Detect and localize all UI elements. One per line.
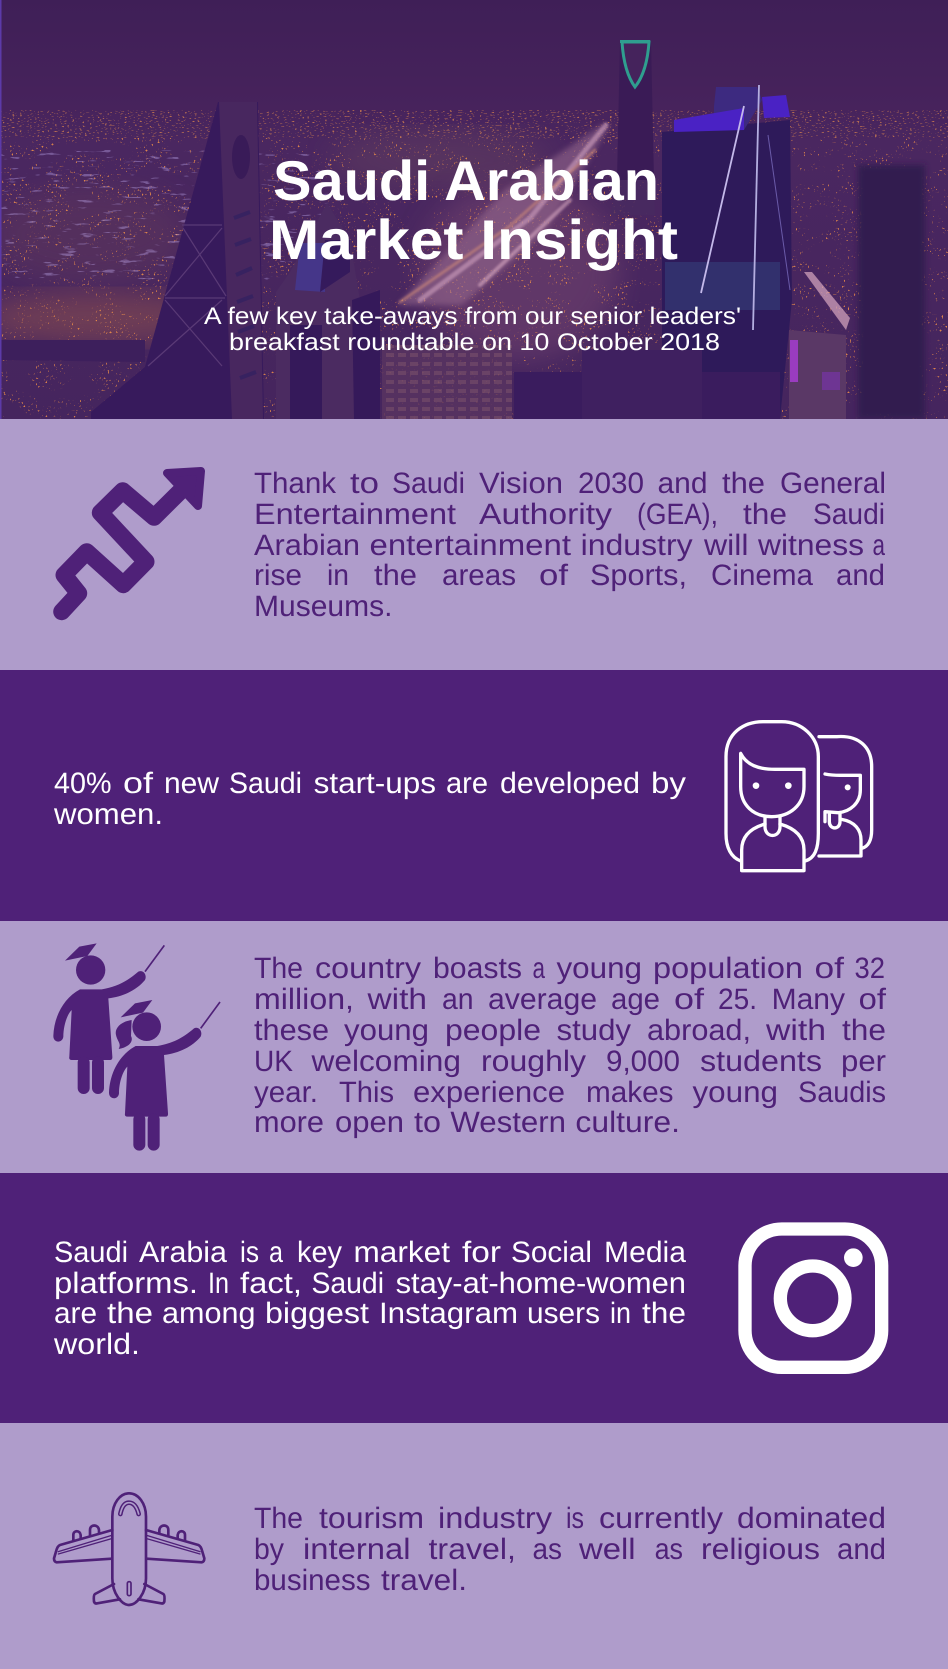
text: social media market: users: [527, 1297, 600, 1330]
text: 40% of start-ups: developed: [500, 767, 640, 800]
text: young population: these: [254, 1014, 329, 1047]
text: young population: UK: [254, 1045, 293, 1078]
text: young population: study: [556, 1014, 631, 1047]
text: tourism industry: business: [254, 1564, 370, 1597]
subtitle: A few key take-aways from our senior leaders': [204, 303, 741, 330]
text: young population: of: [674, 983, 705, 1016]
text: social media market: Social: [511, 1236, 592, 1269]
title: Market Insight: [269, 208, 678, 271]
text: young population: abroad,: [647, 1014, 751, 1047]
text: 40% of start-ups: are: [446, 767, 488, 800]
text: young population: Many: [772, 983, 845, 1016]
text: Saudi Vision 2030: entertainment: [370, 529, 571, 562]
text: Saudi Vision 2030: a: [872, 529, 885, 562]
text: young population: This: [339, 1076, 394, 1109]
text: Saudi Vision 2030: of: [539, 559, 569, 592]
text: 40% of start-ups: women.: [53, 798, 163, 831]
text: social media market: Arabia: [139, 1236, 228, 1269]
text: tourism industry: as: [655, 1533, 683, 1566]
text: young population: 25.: [718, 983, 757, 1016]
text: young population: country: [315, 952, 421, 985]
text: young population: young: [344, 1014, 429, 1047]
text: social media market: fact,: [240, 1267, 302, 1300]
text: Saudi Vision 2030: the: [722, 467, 765, 500]
tower: Kingdom Centre: [610, 40, 655, 215]
text: social media market: the: [642, 1297, 686, 1330]
buildings: foreground blocks: [514, 165, 925, 419]
text: young population: The: [254, 952, 303, 985]
text: young population: experience: [413, 1076, 565, 1109]
text: young population: 9,000: [606, 1045, 680, 1078]
text: social media market: market: [354, 1236, 450, 1269]
text: social media market: Saudi: [54, 1236, 128, 1269]
text: tourism industry: travel,: [428, 1533, 516, 1566]
text: social media market: is: [240, 1236, 259, 1269]
text: young population: students: [700, 1045, 822, 1078]
text: Saudi Vision 2030: the: [743, 498, 787, 531]
text: tourism industry: industry: [438, 1502, 552, 1535]
text: tourism industry: by: [254, 1533, 284, 1566]
text: young population: of: [859, 983, 887, 1016]
text: young population: people: [445, 1014, 541, 1047]
text: young population: 32: [854, 952, 885, 985]
text: social media market: are: [54, 1297, 97, 1330]
text: young population: age: [611, 983, 660, 1016]
text: Saudi Vision 2030: Authority: [479, 498, 612, 531]
text: Saudi Vision 2030: industry: [581, 529, 693, 562]
subtitle: breakfast roundtable on 10 October 2018: [229, 329, 720, 356]
text: tourism industry: and: [837, 1533, 886, 1566]
text: Saudi Vision 2030: and: [658, 467, 708, 500]
text: social media market: a: [269, 1236, 283, 1269]
text: young population: a: [532, 952, 545, 985]
text: young population: more: [254, 1106, 324, 1139]
icon: airplane: [54, 1493, 204, 1605]
title: [269, 149, 678, 271]
icon: students with pointers: [53, 943, 220, 1151]
text: Saudi Vision 2030: Thank: [254, 467, 336, 500]
icon: Instagram logo: [745, 1229, 882, 1367]
text: young population: young: [556, 952, 642, 985]
text: young population: an: [442, 983, 474, 1016]
text: tourism industry: tourism: [319, 1502, 424, 1535]
text: social media market: key: [297, 1236, 342, 1269]
text: Saudi Vision 2030: areas: [442, 559, 516, 592]
text: social media market: Media: [604, 1236, 687, 1269]
panel: tourism: [0, 1423, 948, 1669]
road: light trails: [398, 125, 610, 305]
text: social media market: In: [208, 1267, 229, 1300]
text: Saudi Vision 2030: Vision: [479, 467, 563, 500]
text: social media market: Instagram: [379, 1297, 518, 1330]
text: tourism industry: well: [578, 1533, 636, 1566]
text: young population: million,: [254, 983, 354, 1016]
text: young population: year.: [254, 1076, 318, 1109]
text: young population: the: [842, 1014, 886, 1047]
tower: Al Faisaliah: [91, 102, 264, 419]
text: tourism industry: as: [532, 1533, 562, 1566]
text: tourism industry: is: [566, 1502, 584, 1535]
text: young population: to: [414, 1106, 441, 1139]
text: social media market: stay-at-home-women: [396, 1267, 686, 1300]
text: social media market: biggest: [265, 1297, 369, 1330]
tower: Al Anoud: [276, 203, 380, 419]
text: tourism industry: religious: [701, 1533, 820, 1566]
text: young population: boasts: [433, 952, 522, 985]
text: Saudi Vision 2030: 2030: [578, 467, 644, 500]
text: Saudi Vision 2030: will: [703, 529, 748, 562]
text: Saudi Vision 2030: General: [780, 467, 886, 500]
text: Saudi Vision 2030: Sports,: [590, 559, 687, 592]
text: 40% of start-ups: Saudi: [229, 767, 302, 800]
text: young population: young: [692, 1076, 778, 1109]
panel: women start-ups: [0, 670, 948, 921]
text: social media market: for: [462, 1236, 501, 1269]
text: tourism industry: internal: [303, 1533, 410, 1566]
subtitle: [204, 303, 741, 356]
icon: rising zigzag arrow: [62, 471, 201, 612]
panel: entertainment industry: [0, 419, 948, 670]
text: social media market: platforms.: [54, 1267, 198, 1300]
text: Saudi Vision 2030: to: [350, 467, 379, 500]
text: Saudi Vision 2030: the: [374, 559, 417, 592]
hero photo: Riyadh skyline at night: [0, 0, 948, 419]
text: Saudi Vision 2030: in: [327, 559, 349, 592]
text: young population: of: [814, 952, 845, 985]
text: young population: population: [653, 952, 803, 985]
panel: social media: [0, 1173, 948, 1423]
text: tourism industry: The: [254, 1502, 303, 1535]
text: young population: Western: [450, 1106, 566, 1139]
text: social media market: in: [610, 1297, 631, 1330]
text: young population: per: [841, 1045, 886, 1078]
text: Saudi Vision 2030: Entertainment: [254, 498, 456, 531]
text: Saudi Vision 2030: and: [836, 559, 885, 592]
text: social media market: Saudi: [312, 1267, 384, 1300]
title: Saudi Arabian: [273, 149, 659, 212]
text: tourism industry: dominated: [737, 1502, 886, 1535]
text: 40% of start-ups: new: [164, 767, 220, 800]
text: Saudi Vision 2030: witness: [757, 529, 864, 562]
text: 40% of start-ups: start-ups: [314, 767, 436, 800]
text: Saudi Vision 2030: Saudi: [392, 467, 465, 500]
text: young population: makes: [586, 1076, 674, 1109]
text: social media market: the: [107, 1297, 153, 1330]
text: young population: roughly: [481, 1045, 586, 1078]
text: Saudi Vision 2030: Cinema: [711, 559, 814, 592]
text: young population: with: [765, 1014, 826, 1047]
text: tourism industry: currently: [599, 1502, 723, 1535]
panel: young population: [0, 921, 948, 1173]
text: young population: average: [488, 983, 597, 1016]
text: 40% of start-ups: 40%: [54, 767, 112, 800]
text: tourism industry: travel.: [381, 1564, 467, 1597]
text: young population: culture.: [575, 1106, 680, 1139]
text: young population: with: [366, 983, 427, 1016]
text: Saudi Vision 2030: Arabian: [254, 529, 360, 562]
text: Saudi Vision 2030: Saudi: [813, 498, 885, 531]
tower: blue-lit glass tower: [662, 85, 792, 419]
text: young population: Saudis: [798, 1076, 886, 1109]
text: Saudi Vision 2030: rise: [254, 559, 302, 592]
panel: hero header: [0, 0, 948, 419]
text: young population: welcoming: [310, 1045, 461, 1078]
icon: two women: [726, 722, 872, 871]
text: social media market: world.: [53, 1328, 140, 1361]
text: 40% of start-ups: by: [651, 767, 686, 800]
text: Saudi Vision 2030: (GEA),: [637, 498, 718, 531]
text: young population: open: [335, 1106, 404, 1139]
text: Saudi Vision 2030: Museums.: [254, 590, 392, 623]
text: 40% of start-ups: of: [123, 767, 154, 800]
text: social media market: among: [162, 1297, 256, 1330]
